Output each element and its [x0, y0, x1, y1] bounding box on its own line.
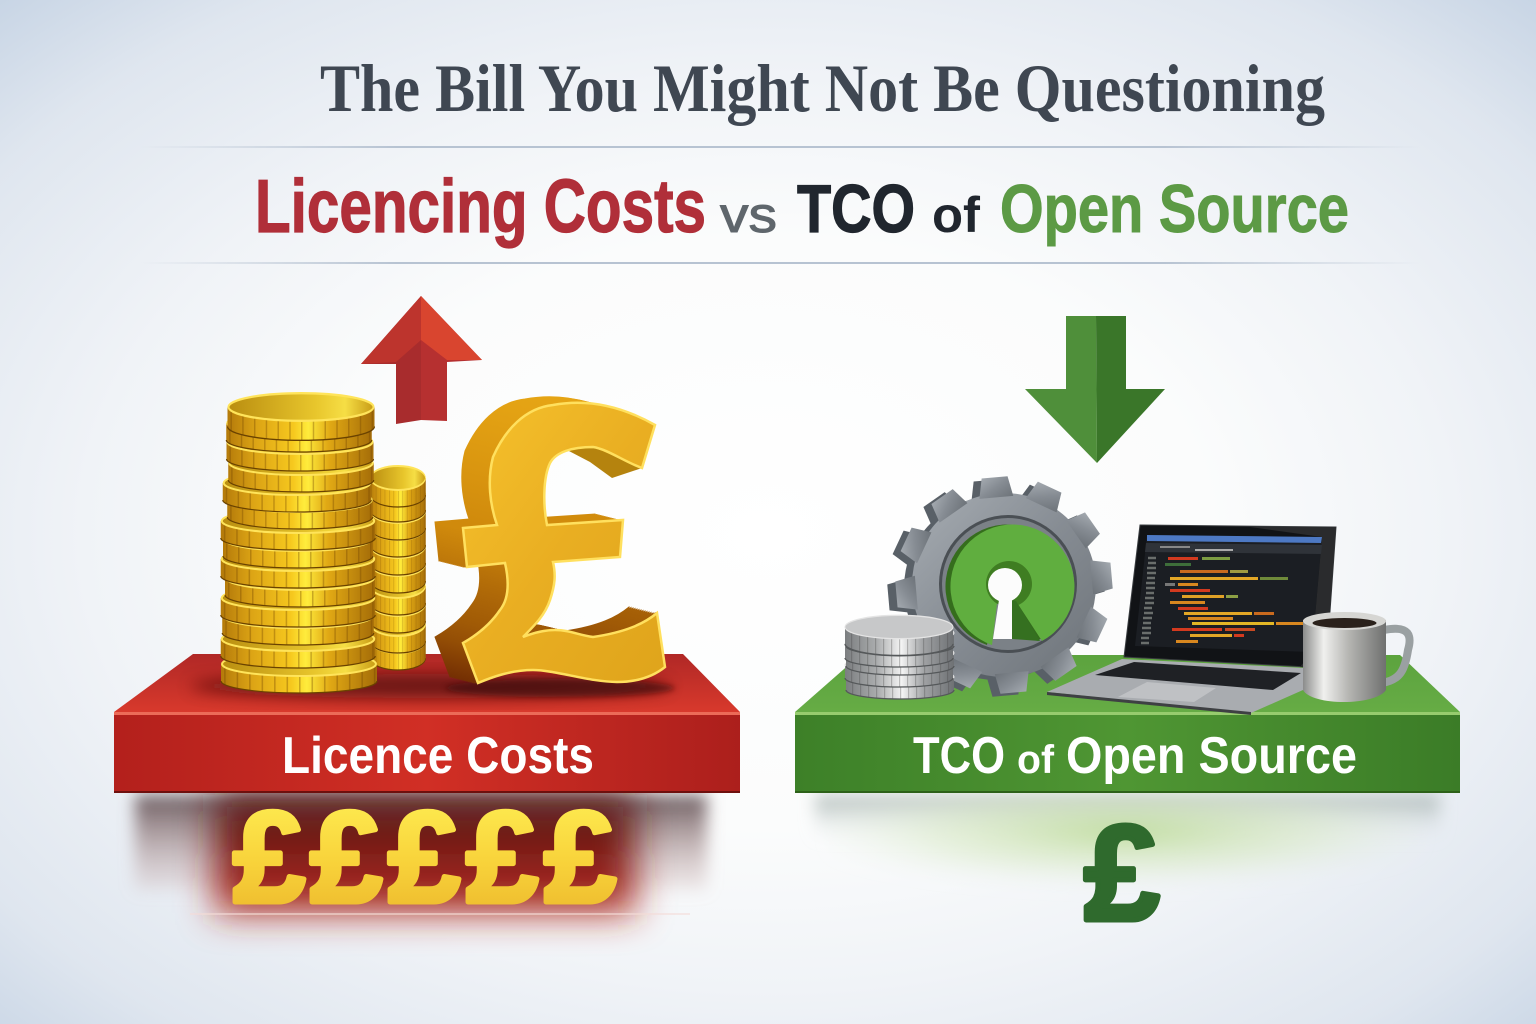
subtitle: Open Source [1000, 171, 1349, 247]
icon: coffee mug [1303, 612, 1410, 702]
five gold pounds: £ [310, 784, 382, 930]
label: TCO of open source [913, 727, 1357, 785]
green pound: £ [1084, 797, 1160, 949]
subtitle: TCO [797, 171, 915, 247]
green glow under platform [815, 795, 1440, 900]
icon: red up arrow [361, 296, 482, 424]
red shadow under platform [135, 795, 707, 915]
label: TCO of open source: TCO [913, 727, 1005, 785]
icon: laptop [1047, 525, 1336, 715]
label: licence costs: Licence Costs [282, 727, 594, 785]
five gold pounds: £ [544, 784, 616, 930]
icon: tall coin stack [221, 393, 377, 693]
green open source disc [945, 524, 1074, 645]
five gold pounds: £ [388, 784, 460, 930]
subtitle: of [932, 187, 980, 243]
subtitle [255, 164, 1349, 248]
green platform [795, 655, 1460, 793]
icon: silver coins [845, 615, 954, 699]
icon: green down arrow [1025, 316, 1165, 463]
icon: short coin stack [370, 466, 426, 670]
five gold pounds: £ [466, 784, 538, 930]
panel: licence costs [114, 296, 740, 930]
subtitle: vs [720, 187, 777, 243]
panel: TCO of open source [795, 316, 1460, 949]
label: TCO of open source: of [1017, 738, 1055, 782]
label: TCO of open source: Open Source [1066, 727, 1357, 785]
five gold pounds [233, 784, 616, 930]
icon: open source gear [887, 476, 1113, 697]
laptop screen [1124, 525, 1336, 668]
code lines [1141, 557, 1306, 643]
red platform [114, 654, 740, 793]
icon: large gold pound [435, 397, 675, 697]
title: The Bill You Might Not Be Questioning [320, 50, 1325, 126]
five gold pounds: £ [233, 784, 305, 930]
subtitle: Licencing Costs [255, 164, 706, 248]
laptop base [1047, 659, 1305, 713]
